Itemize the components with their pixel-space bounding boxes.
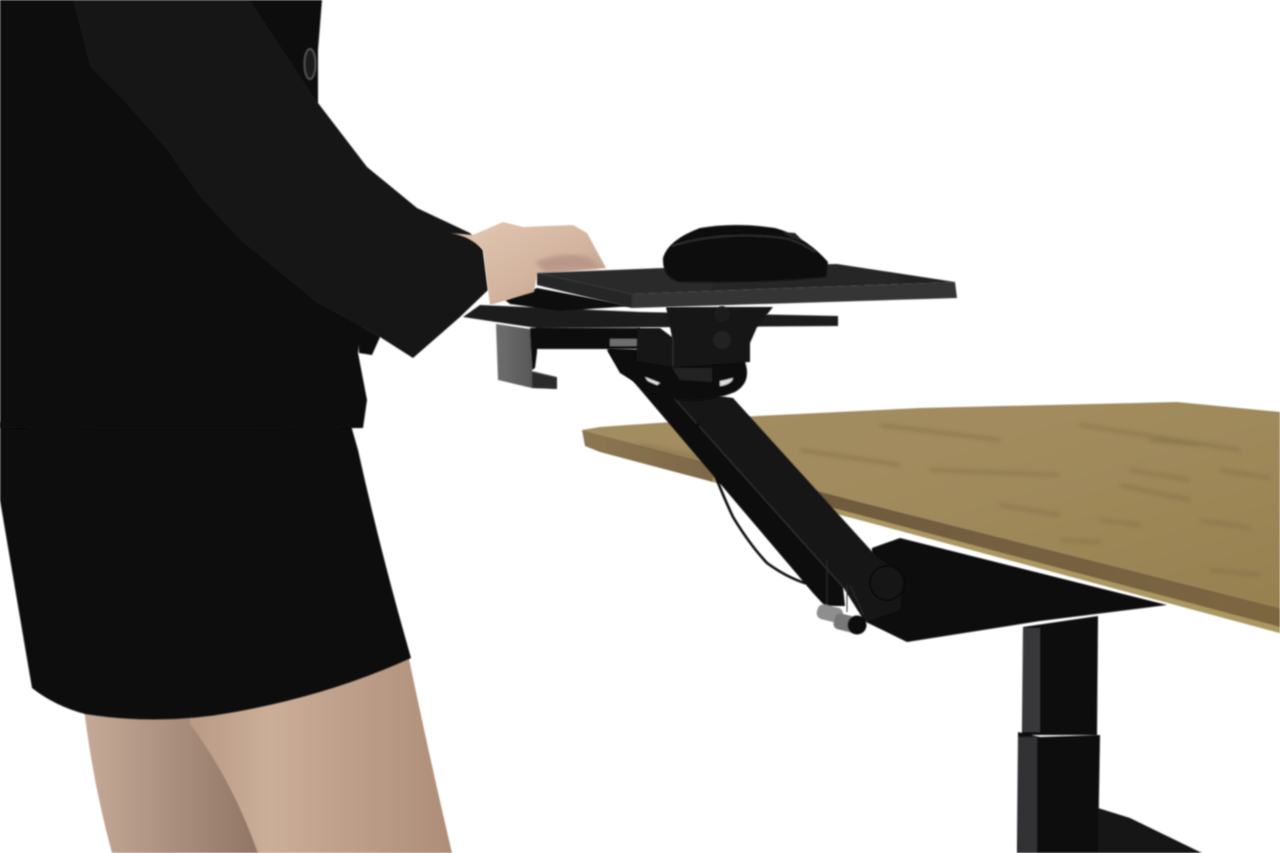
lower column highlight bbox=[1018, 737, 1037, 853]
tray plate bbox=[463, 305, 838, 328]
keyboard bbox=[505, 288, 632, 311]
clip hook bbox=[532, 372, 557, 389]
tray clip bracket bbox=[496, 324, 557, 389]
desk bracket box bbox=[866, 538, 1167, 642]
mouse pad bbox=[537, 264, 957, 308]
tray rail highlight bbox=[610, 339, 638, 346]
arm top face bbox=[665, 388, 903, 622]
jacket button bbox=[304, 49, 316, 79]
arm pivot bbox=[870, 566, 904, 600]
mouse highlight bbox=[672, 236, 815, 252]
lower column bbox=[1017, 732, 1100, 853]
arm highlight bbox=[665, 388, 843, 587]
arm fins bbox=[827, 560, 864, 615]
desk front edge bbox=[582, 430, 1280, 633]
keyboard tray bbox=[463, 288, 838, 389]
column highlight bbox=[1023, 628, 1040, 732]
jacket bbox=[0, 0, 488, 429]
ring inner bbox=[672, 368, 712, 382]
foot rail bbox=[1098, 808, 1202, 853]
mouse bbox=[663, 225, 828, 282]
desk leg bbox=[1017, 616, 1202, 853]
finger shadow bbox=[535, 255, 600, 272]
jacket sleeve bbox=[73, 0, 488, 358]
legs bbox=[83, 640, 452, 853]
mouse body bbox=[663, 225, 828, 282]
ring highlights bbox=[645, 377, 660, 385]
cable bbox=[697, 423, 815, 586]
swivel ring bbox=[607, 348, 747, 401]
right leg bbox=[190, 640, 452, 853]
clip inner bbox=[530, 329, 537, 370]
skirt bbox=[0, 422, 411, 720]
scroll wheel bbox=[782, 232, 803, 241]
mount bolts bbox=[714, 306, 730, 322]
desk top bbox=[582, 402, 1280, 633]
mount plate bbox=[637, 307, 773, 367]
tray arm bbox=[607, 350, 904, 634]
upper column bbox=[1022, 616, 1098, 735]
tray rail bbox=[530, 328, 640, 349]
cuff vent bbox=[358, 325, 380, 355]
pad left edge bbox=[537, 273, 632, 308]
desk lower edge highlight bbox=[713, 477, 1280, 633]
lever knob bbox=[815, 603, 866, 634]
pocket flap bbox=[148, 175, 238, 265]
mount outline bbox=[672, 337, 674, 366]
arm side face bbox=[607, 350, 845, 606]
hand bbox=[450, 222, 606, 305]
desk wood grain bbox=[640, 425, 1270, 575]
hand shape bbox=[450, 222, 606, 305]
pad front edge bbox=[632, 282, 957, 308]
swivel mount bbox=[607, 306, 773, 401]
pad top bbox=[537, 264, 955, 294]
desk surface bbox=[582, 402, 1280, 608]
jacket seams bbox=[15, 133, 273, 427]
left leg bbox=[83, 700, 262, 853]
jacket body bbox=[0, 0, 370, 429]
